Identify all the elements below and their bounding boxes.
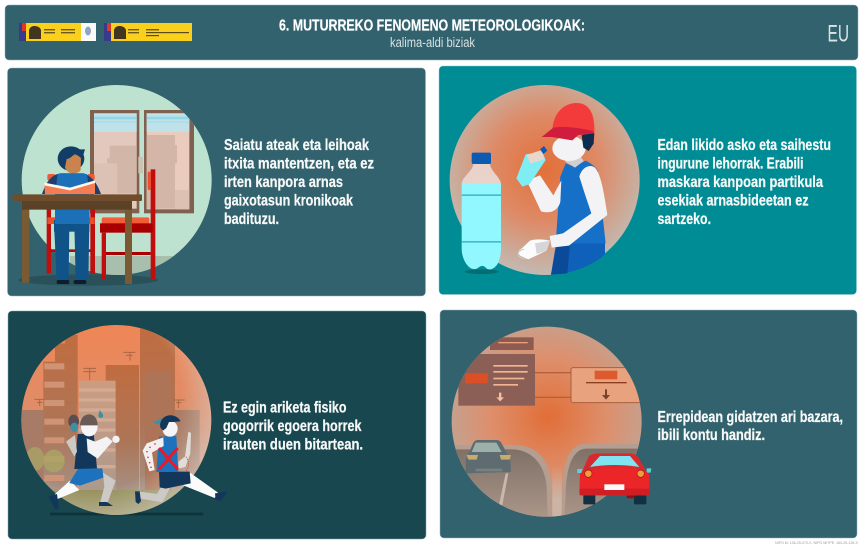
illustration: cars on a hazy road junction [450,325,651,520]
red car [577,453,651,504]
logo: ministry of ecological transition [104,23,192,41]
text: stay indoors advice: itxita mantentzen, eta ez [224,156,374,172]
runner: man with warning cross [135,415,228,504]
language tag: EU [828,20,849,48]
text: exercise advice: gogorrik egoera horrek [223,418,362,435]
table [13,194,142,284]
text: stay indoors advice: gaixotasun kronikoak [224,192,353,210]
footer reference code: NIPO M: 136-25-070-X. NIPO MITPE: 164-25-139-X [775,541,858,545]
illustration: person reading at a table beside a closed window [13,85,223,286]
panel: drink fluids and wear a mask [439,66,856,294]
text: stay indoors advice: Saiatu ateak eta leihoak [224,137,369,154]
logo: ministry of health [19,23,96,41]
panel: avoid hard exercise [8,311,426,539]
subtitle: kalima-aldi biziak [390,35,475,50]
person [42,146,101,284]
title: 6. MUTURREKO FENOMENO METEOROLOGIKOAK: [279,18,585,34]
runner: woman [48,410,120,510]
header panel [5,5,858,60]
text: hydration and mask advice: ingurune lehorrak. Erabili [658,156,804,172]
illustration: person drinking water and holding a mask [450,85,640,275]
illustration: two runners in a hazy city [18,323,228,518]
road [450,444,645,520]
road signs [458,337,643,406]
text: exercise advice: Ez egin ariketa fisiko [223,400,346,416]
grey car [466,440,511,473]
text: hydration and mask advice: esekiak arnasbideetan ez [658,192,809,210]
back chair [47,174,95,274]
text: exercise advice: irauten duen bitartean. [223,436,363,454]
text: hydration and mask advice: sartzeko. [658,211,711,228]
panel: drive carefully [440,310,857,538]
window [90,110,194,213]
text: hydration and mask advice: maskara kanpoan partikula [658,174,823,191]
text: exercise advice [223,400,363,454]
front chair [100,169,155,279]
text: driving advice: ibili kontu handiz. [658,427,765,444]
text: stay indoors advice: irten kanpora arnas [224,174,343,191]
large water bottle [462,153,501,274]
text: hydration and mask advice [658,137,831,228]
text: driving advice [658,409,843,444]
person [516,103,607,275]
text: stay indoors advice: badituzu. [224,211,279,228]
text: stay indoors advice [224,137,374,228]
panel: stay indoors [8,68,426,296]
